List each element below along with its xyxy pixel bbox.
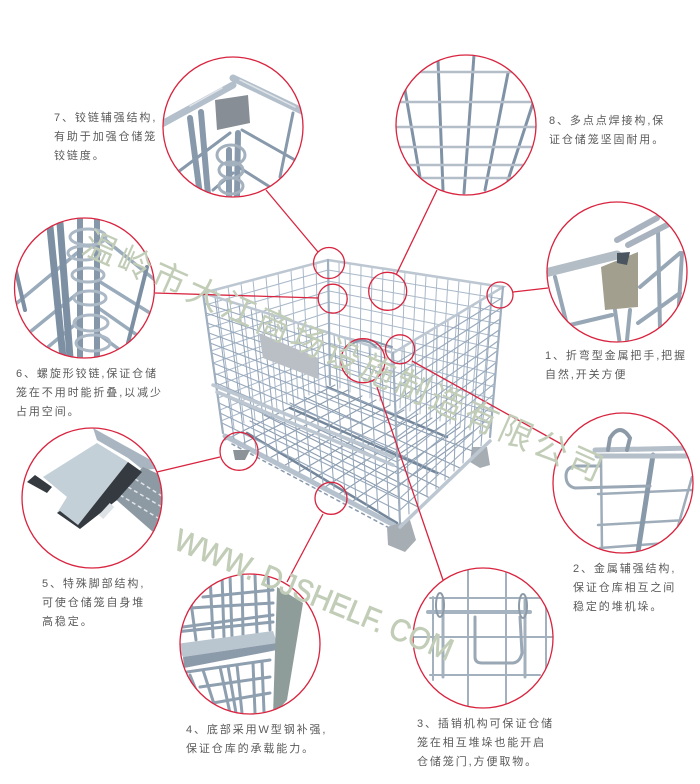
caption 6: 占用空间。 [16, 404, 80, 418]
caption 1: 1、折弯型金属把手,把握 [545, 348, 687, 362]
detail circle 5 [22, 428, 165, 568]
caption 2: 2、金属辅强结构, [573, 561, 676, 575]
caption 3: 仓储笼门,方便取物。 [417, 754, 538, 768]
detail circle 2 [553, 413, 695, 553]
caption 7: 有助于加强仓储笼 [54, 129, 157, 143]
panel 3: latch mechanism [410, 565, 555, 768]
central wire storage cage [203, 260, 503, 552]
detail circle 8 [395, 55, 540, 195]
panel 6: spiral hinge [14, 218, 163, 418]
caption 2: 稳定的堆机垛。 [573, 599, 663, 613]
panel 2: metal reinforcement [553, 413, 695, 613]
caption 4: 保证仓库的承载能力。 [186, 741, 315, 755]
panel 8: multi-point welding [395, 55, 665, 195]
caption 6: 6、螺旋形铰链,保证仓储 [16, 366, 158, 380]
cage back walls [205, 262, 502, 434]
caption 7: 铰链度。 [54, 148, 106, 162]
watermark: website: WWW. DJSHELF. COM [169, 522, 458, 668]
caption 6: 笼在不用时能折叠,以减少 [16, 385, 163, 399]
detail circle 4 [175, 574, 320, 716]
panel 5: special foot structure [22, 428, 165, 628]
caption 5: 可使仓储笼自身堆 [42, 595, 145, 609]
watermark: company name: 温岭市大江商场设施制造有限公司 [77, 225, 608, 489]
door label plate [259, 333, 318, 379]
detail circle 7 [160, 57, 304, 197]
red pointer lines and small target rings [155, 190, 563, 582]
cage feet [233, 447, 490, 552]
caption 1: 自然,开关方便 [545, 367, 627, 381]
caption 3: 3、插销机构可保证仓储 [417, 716, 554, 730]
panel 7: hinge reinforcement [54, 57, 304, 197]
detail circle 1 [545, 202, 687, 345]
caption 5: 5、特殊脚部结构, [42, 576, 145, 590]
cage frame rails [203, 260, 503, 527]
caption 7: 7、铰链辅强结构, [54, 110, 157, 124]
cage front walls [204, 294, 502, 517]
caption 2: 保证仓库相互之间 [573, 580, 676, 594]
detail circle 3 [410, 565, 555, 712]
caption 5: 高稳定。 [42, 614, 94, 628]
detail circle 6 [14, 218, 155, 358]
caption 8: 8、多点点焊接构,保 [549, 113, 665, 127]
caption 3: 笼在相互堆垛也能开启 [417, 735, 546, 749]
caption 8: 证仓储笼坚固耐用。 [549, 132, 665, 146]
cage floor [225, 385, 475, 531]
panel 4: W-section steel base [175, 574, 327, 755]
caption 4: 4、底部采用W型钢补强, [186, 722, 327, 736]
panel 1: folded metal handle [545, 202, 687, 381]
